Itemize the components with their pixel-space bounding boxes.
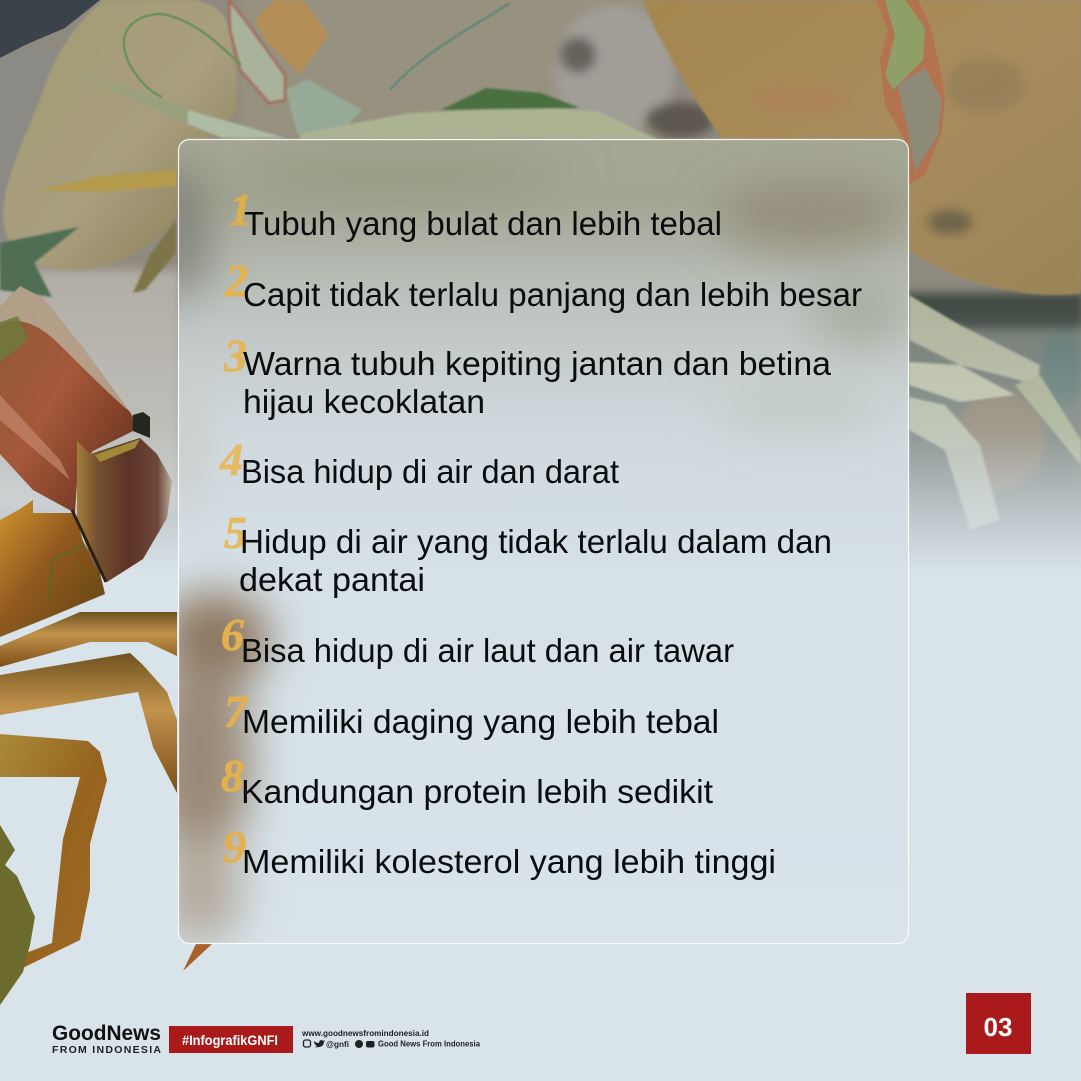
item 3: hijau kecoklatan: [243, 383, 485, 420]
small orange pebble: [257, 2, 326, 71]
item 9: Memiliki kolesterol yang lebih tinggi: [242, 843, 776, 880]
website and social handles: Good News From Indonesia: [378, 1040, 481, 1048]
item 5: 5: [224, 507, 247, 558]
item 1: Tubuh yang bulat dan lebih tebal: [244, 205, 722, 242]
crab: first leg: [0, 612, 177, 667]
item 8: 8: [221, 750, 244, 801]
website and social handles: www.goodnewsfromindonesia.id: [301, 1029, 429, 1038]
left pebble: [3, 0, 237, 270]
item 7: [224, 686, 719, 740]
item 3: 3: [223, 330, 247, 381]
crab: upper claw: [0, 286, 137, 513]
item 6: 6: [221, 609, 244, 660]
frosted glass panel: [148, 139, 910, 945]
footer logo: GoodNews: [52, 1022, 161, 1045]
page number badge: [966, 993, 1031, 1054]
background photo: rocks and crab legs: [0, 0, 1081, 570]
item 2: 2: [224, 255, 248, 306]
green stems right: [909, 295, 1081, 530]
item 9: [223, 821, 776, 880]
page number badge: 03: [984, 1012, 1012, 1042]
website and social handles: @gnfi: [326, 1040, 349, 1049]
item 3: Warna tubuh kepiting jantan dan betina: [243, 345, 832, 382]
item 3: [223, 330, 832, 420]
fade to pale background: [0, 290, 1081, 575]
crab leg on rock: [876, 0, 945, 185]
item 5: [224, 507, 832, 598]
crab: third leg: [0, 734, 107, 979]
crab: shell body: [0, 500, 105, 637]
item 7: 7: [224, 686, 249, 737]
crab: leg tip: [183, 944, 212, 971]
hashtag badge: #InfografikGNFI: [182, 1032, 278, 1048]
green stems top: [0, 0, 657, 297]
item 5: Hidup di air yang tidak terlalu dalam dan: [240, 523, 832, 560]
footer logo: [52, 1022, 161, 1056]
website and social handles: [301, 1029, 481, 1049]
right large rock: [643, 0, 1081, 295]
item 6: Bisa hidup di air laut dan air tawar: [241, 632, 734, 669]
item 4: Bisa hidup di air dan darat: [241, 453, 619, 490]
list of characteristics: [219, 184, 862, 880]
hashtag badge: [169, 1026, 293, 1053]
item 9: 9: [223, 821, 246, 872]
item 8: Kandungan protein lebih sedikit: [241, 773, 713, 810]
item 4: [219, 434, 619, 490]
item 5: dekat pantai: [239, 561, 425, 598]
item 2: [224, 255, 862, 313]
item 2: Capit tidak terlalu panjang dan lebih besar: [243, 276, 862, 313]
crab: lower body: [0, 825, 35, 1005]
item 1: 1: [229, 184, 252, 235]
crab: [0, 286, 212, 1005]
dark rock corner: [0, 0, 100, 58]
item 4: 4: [219, 434, 243, 485]
footer logo: FROM INDONESIA: [52, 1044, 161, 1056]
crab: lower claw: [77, 438, 172, 582]
item 6: [221, 609, 734, 669]
item 7: Memiliki daging yang lebih tebal: [242, 703, 719, 740]
item 1: [229, 184, 722, 242]
item 8: [221, 750, 713, 810]
crab: second leg: [0, 653, 177, 793]
